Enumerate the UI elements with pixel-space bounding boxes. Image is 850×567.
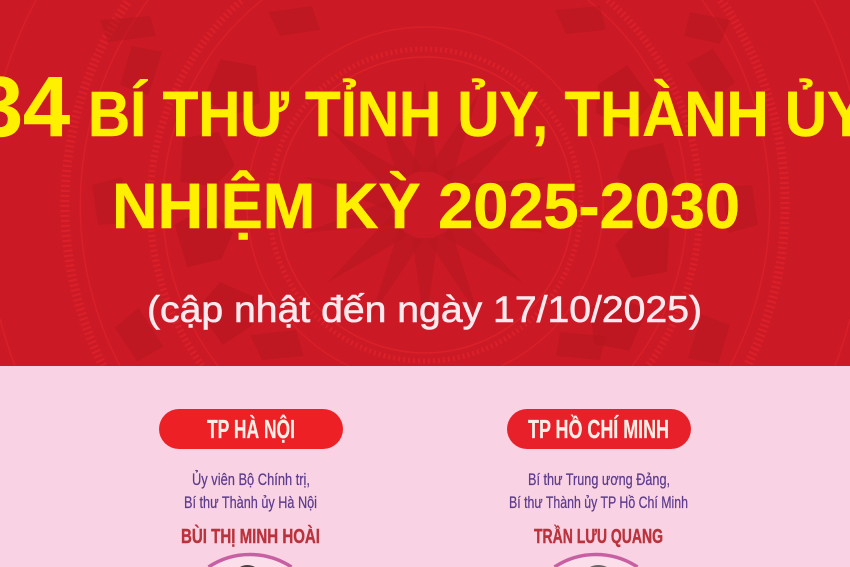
- badge: TP Hà Nội: [159, 409, 343, 449]
- role description: [184, 470, 317, 512]
- role description: Ủy viên Bộ Chính trị,: [192, 470, 310, 489]
- name: BÙI THỊ MINH HOÀI: [181, 524, 320, 548]
- badge: TP Hồ Chí Minh: [507, 409, 691, 449]
- badge: TP Hồ Chí Minh: TP HỒ CHÍ MINH: [528, 414, 669, 444]
- drum motifs: [92, 6, 758, 371]
- portrait circle: [208, 554, 292, 567]
- portrait circle: [554, 554, 638, 567]
- card: TP Hà Nội: [159, 409, 343, 567]
- bronze drum pattern: [0, 0, 850, 366]
- header band: [0, 0, 850, 371]
- role description: Bí thư Thành ủy TP Hồ Chí Minh: [509, 493, 688, 512]
- title line 2: NHIỆM KỲ 2025-2030: [112, 169, 740, 242]
- role description: Bí thư Thành ủy Hà Nội: [184, 493, 317, 512]
- card: TP Hồ Chí Minh: [507, 409, 691, 567]
- title line 1: [0, 60, 850, 155]
- name: TRẦN LƯU QUANG: [534, 525, 663, 548]
- role description: Bí thư Trung ương Đảng,: [528, 470, 670, 489]
- subtitle: update date: (cập nhật đến ngày 17/10/2025): [147, 289, 702, 330]
- badge: TP Hà Nội: TP HÀ NỘI: [207, 414, 295, 444]
- pink content panel: [0, 366, 850, 567]
- central star: [300, 80, 550, 330]
- role description: [509, 470, 688, 512]
